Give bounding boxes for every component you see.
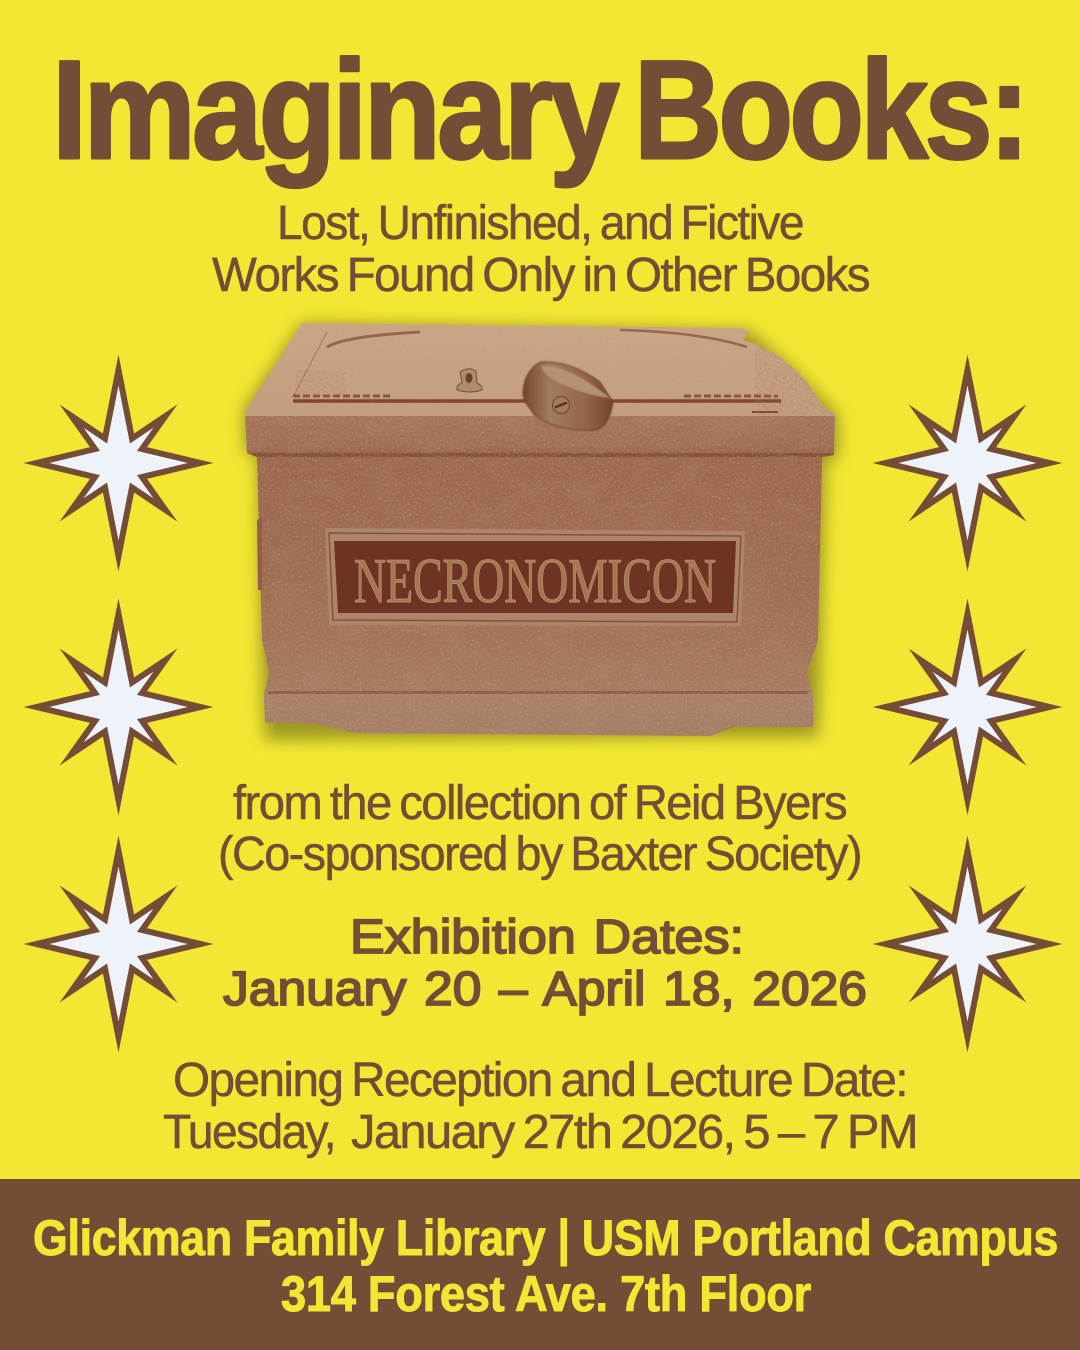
star: left top: [36, 370, 200, 556]
photo: Necronomicon box: [240, 320, 840, 743]
lid corner speckle: [755, 345, 835, 415]
title: Imaginary: [52, 31, 620, 188]
subtitle: Lost, Unfinished, and Fictive: [277, 197, 803, 250]
lid top grain: [240, 320, 840, 418]
opening reception: January 27th 2026, 5 – 7 PM: [351, 1106, 917, 1159]
lock stub: [531, 410, 556, 430]
title: Books:: [634, 31, 1026, 188]
star: left middle: [36, 614, 200, 800]
box shadow glow: [243, 323, 838, 740]
exhibition dates: Exhibition Dates:: [350, 911, 744, 964]
collection credit: from the collection of Reid Byers: [233, 777, 847, 830]
star: right middle: [886, 614, 1050, 800]
lid top: [240, 320, 840, 418]
body: [250, 456, 830, 694]
footer location text: [33, 1210, 1058, 1322]
side hinges: [257, 518, 262, 590]
exhibition dates: [223, 911, 867, 1016]
collection credit: (Co-sponsored by Baxter Society): [218, 828, 861, 881]
lid underside line: [245, 453, 837, 457]
lid panel markings: [293, 330, 781, 412]
knob: [457, 369, 482, 392]
opening reception: Opening Reception and Lecture Date:: [173, 1054, 907, 1107]
subtitle: Works Found Only in Other Books: [212, 249, 870, 302]
subtitle: [212, 197, 870, 302]
collection credit: [218, 777, 861, 881]
padlock: [523, 362, 613, 430]
opening reception: Tuesday,: [163, 1106, 335, 1159]
lid front: [240, 416, 840, 458]
footer band: [0, 1179, 1080, 1350]
star: right bottom: [886, 851, 1050, 1037]
plaque: [325, 528, 745, 626]
footer location text: 314 Forest Ave. 7th Floor: [281, 1266, 811, 1322]
title: [52, 31, 1026, 188]
plaque text: NECRONOMICON: [354, 546, 716, 616]
opening reception: [163, 1054, 917, 1159]
base: [264, 693, 813, 736]
star: left bottom: [36, 851, 200, 1037]
star: right top: [886, 370, 1050, 556]
body texture: [240, 416, 840, 741]
exhibition dates: January 20 – April 18, 2026: [223, 963, 867, 1016]
